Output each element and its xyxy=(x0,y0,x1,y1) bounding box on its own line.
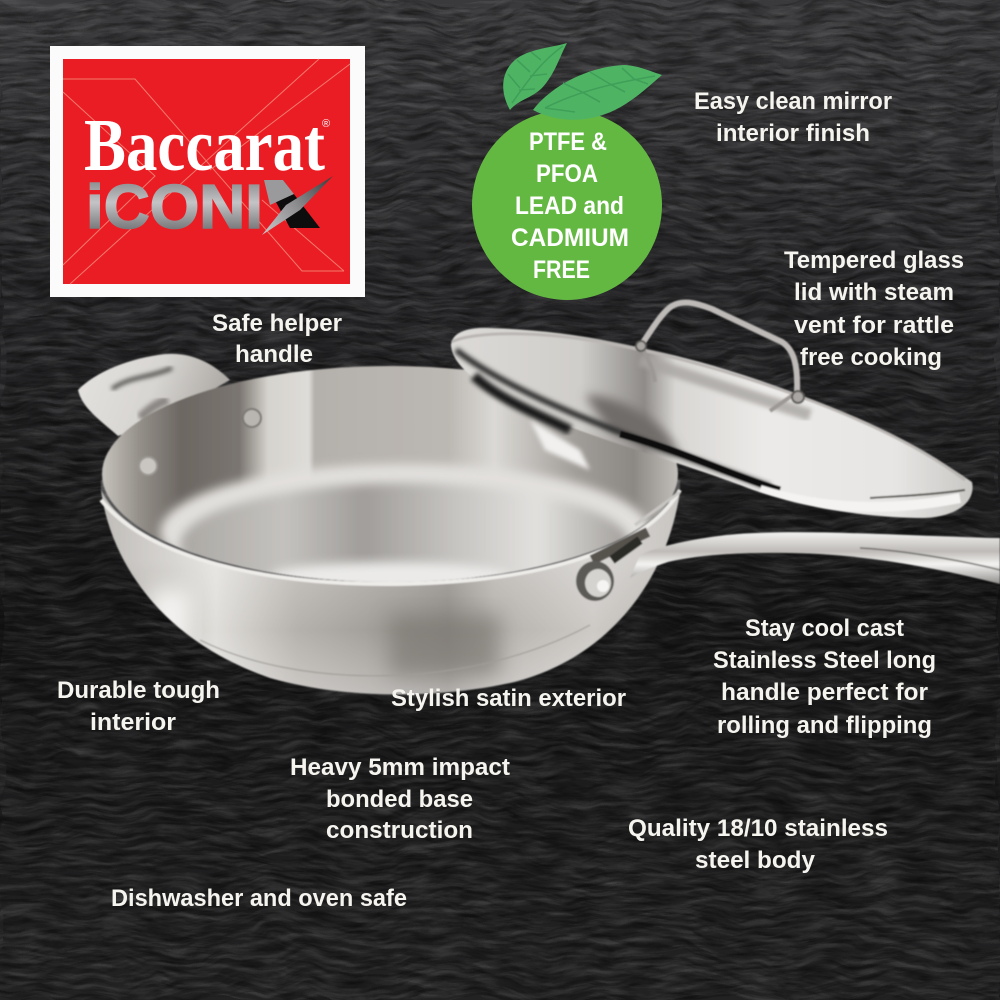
logo white frame xyxy=(50,46,365,297)
callout: easy clean xyxy=(694,88,892,147)
callout: stainless steel body: Quality 18/10 stainless xyxy=(628,815,888,842)
callout: easy clean: interior finish xyxy=(716,120,870,147)
logo line pattern xyxy=(63,59,350,284)
callout: safe helper handle xyxy=(212,310,342,368)
badge text: PTFE & xyxy=(529,128,607,156)
pan exterior body xyxy=(101,480,680,694)
callout: durable interior xyxy=(57,677,220,736)
small leaf xyxy=(503,43,567,110)
callout: stay cool handle: rolling and flipping xyxy=(717,712,932,739)
callout: stainless steel body: steel body xyxy=(695,847,816,874)
callout: tempered glass lid: free cooking xyxy=(800,344,942,371)
lid knob front xyxy=(641,346,797,411)
callout: impact bonded base: Heavy 5mm impact xyxy=(290,754,510,781)
long stainless handle xyxy=(592,492,1000,584)
callout: safe helper handle: Safe helper xyxy=(212,310,342,337)
logo wordmark Baccarat: Baccarat xyxy=(84,105,325,187)
green badge: PTFE free xyxy=(472,43,662,300)
badge text: LEAD and xyxy=(515,192,624,220)
lid knob rivets xyxy=(636,341,804,403)
callout: durable interior: Durable tough xyxy=(57,677,220,704)
pan rim xyxy=(101,490,680,584)
callout: tempered glass lid: lid with steam xyxy=(794,279,954,306)
callout: impact bonded base xyxy=(290,754,510,844)
callout: impact bonded base: construction xyxy=(326,817,473,844)
callout: dishwasher safe: Dishwasher and oven safe xyxy=(111,885,407,912)
callout: impact bonded base: bonded base xyxy=(326,786,473,813)
lid glass xyxy=(451,328,973,518)
callout: satin exterior: Stylish satin exterior xyxy=(391,685,626,712)
helper handle xyxy=(78,354,230,436)
callout: tempered glass lid: vent for rattle xyxy=(794,312,954,339)
logo red panel xyxy=(63,59,350,284)
badge text: PFOA xyxy=(536,160,598,188)
badge text: CADMIUM xyxy=(511,224,629,252)
callout: stay cool handle: Stay cool cast xyxy=(745,615,904,642)
pan interior floor xyxy=(154,460,651,582)
badge text: FREE xyxy=(533,256,590,284)
logo iconix X xyxy=(262,176,333,235)
handle rivet xyxy=(576,561,614,601)
interior rivets xyxy=(139,409,261,475)
lid rim xyxy=(452,334,965,480)
lid shading xyxy=(456,350,965,507)
logo: Baccarat iconix xyxy=(50,46,365,297)
logo registered mark: ® xyxy=(322,118,330,130)
badge text xyxy=(511,128,629,284)
frying pan xyxy=(78,302,1000,694)
logo wordmark iconix: iCONI xyxy=(86,173,263,242)
callout: tempered glass lid xyxy=(784,247,964,371)
pan interior wall xyxy=(102,366,678,582)
green circle xyxy=(472,110,662,300)
callout: stay cool handle xyxy=(713,615,936,739)
lid knob handle xyxy=(640,302,797,392)
feature callouts xyxy=(57,88,964,912)
under-lid shadow on pan xyxy=(474,376,590,470)
callout: safe helper handle: handle xyxy=(235,341,313,368)
callout: easy clean: Easy clean mirror xyxy=(694,88,892,115)
callout: stay cool handle: Stainless Steel long xyxy=(713,647,936,674)
callout: stay cool handle: handle perfect for xyxy=(721,679,928,706)
glass lid xyxy=(451,302,973,518)
callout: durable interior: interior xyxy=(90,709,176,736)
callout: tempered glass lid: Tempered glass xyxy=(784,247,964,274)
large leaf xyxy=(533,65,662,120)
callout: stainless steel body xyxy=(628,815,888,874)
